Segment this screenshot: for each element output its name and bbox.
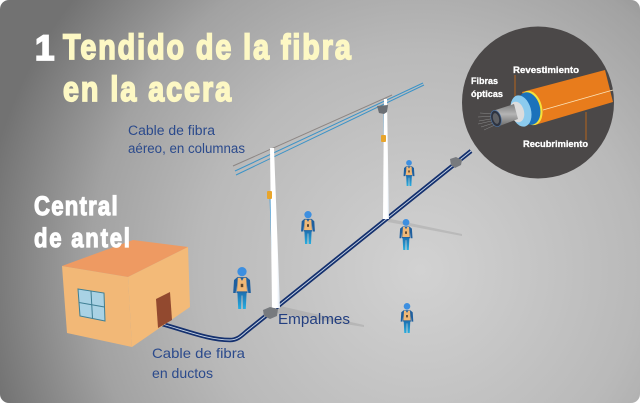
window [78,289,105,321]
label: central: Central [34,192,118,222]
detail labels: Recubrimiento [523,139,589,149]
person 1 [233,267,251,309]
label: central [34,192,130,254]
grey core [494,104,518,126]
label: duct cable: en ductos [152,365,213,381]
cable cross-section detail [462,26,614,178]
detail labels: Fibras [471,76,498,86]
pole drop lines [270,112,384,306]
person 5 [401,303,413,333]
detail labels: ópticas [471,89,503,99]
yellow box 1 [267,191,272,199]
white layer [508,100,526,124]
person 2 [301,211,315,244]
aerial cables [233,83,424,175]
duct cable [162,151,471,340]
person 4 [399,219,413,250]
title text: Tendido de la fibra [63,27,351,67]
detail circle [462,26,614,178]
pole 2 [383,99,389,219]
label: aerial cable: Cable de fibra [128,123,215,138]
ground shadows [276,218,462,327]
detail labels [471,65,589,149]
fibers [478,113,497,130]
title text [63,27,351,109]
label: aerial cable [128,123,245,156]
splice box upper [450,157,462,168]
roof [62,240,188,277]
label: aerial cable: aéreo, en columnas [128,141,245,156]
core end [489,109,503,128]
label: duct cable: Cable de fibra [152,345,245,361]
door [156,292,172,328]
label: duct cable [152,345,245,381]
aerial splice box [377,105,388,114]
label: central: de antel [34,224,130,254]
title text: en la acera [63,69,231,109]
person 3 [404,160,414,186]
building [62,240,190,347]
orange jacket [522,70,613,125]
yellow rim [516,88,546,128]
label: empalmes: Empalmes [278,311,350,328]
detail labels: Revestimiento [513,65,580,75]
yellow box 2 [381,135,386,142]
left wall [62,266,132,347]
splice box lower [263,307,278,319]
title [35,27,351,109]
title number: 1 [35,29,54,68]
blue coating [514,90,544,127]
right wall [128,247,190,347]
light blue layer [507,93,535,129]
leader lines [515,75,586,140]
pole 1 [270,148,280,308]
jacket highlight [543,90,613,110]
